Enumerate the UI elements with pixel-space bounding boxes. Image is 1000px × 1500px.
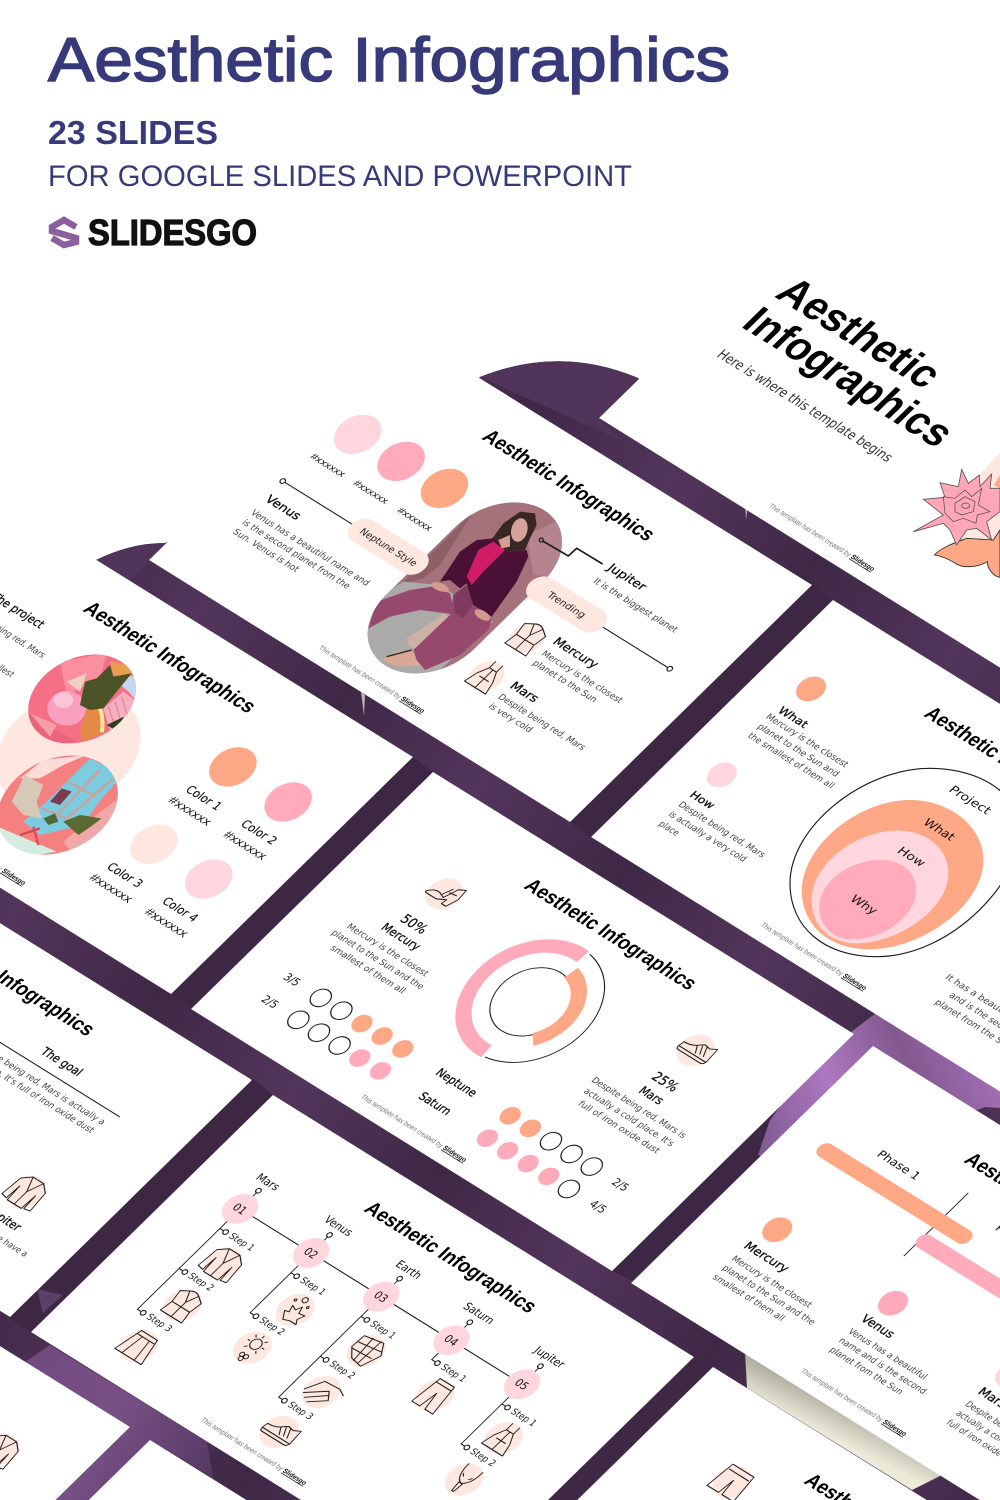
slide heading: Aesthetic Infographics xyxy=(519,875,702,995)
node 05 Jupiter: Jupiter xyxy=(530,1344,568,1371)
node 03 Earth xyxy=(356,1257,426,1317)
Venus block: Venus has a beautiful xyxy=(845,1327,929,1382)
connector from photo to Jupiter xyxy=(539,538,603,564)
icon: shorts xyxy=(704,1460,759,1500)
The goal block: The goal xyxy=(37,1044,86,1079)
Mars stat xyxy=(569,1048,717,1160)
colour 2: #xxxxxx xyxy=(220,829,269,863)
connector to Neptune Style xyxy=(279,478,354,526)
Jupiter text block: Jupiter xyxy=(603,560,650,593)
title slide heading xyxy=(733,268,996,455)
step markers and labels xyxy=(137,1226,540,1500)
Venus text block: Sun. Venus is hot xyxy=(230,527,302,575)
panel: bottom right slide xyxy=(471,1367,1000,1500)
series labels: Neptune xyxy=(433,1066,481,1100)
colour 3 xyxy=(86,816,192,906)
Mars block xyxy=(942,1358,1000,1480)
Mercury stat: smallest of them all xyxy=(327,943,407,996)
right text block xyxy=(923,973,1000,1058)
Mercury item: Mercury xyxy=(550,635,603,671)
diagram labels: Why xyxy=(847,893,881,918)
Venus text block: Venus xyxy=(262,492,305,523)
Jupiter block xyxy=(0,1171,46,1259)
slide heading: Aesthetic Infographics xyxy=(78,598,261,718)
Mercury stat: planet to the Sun and the xyxy=(328,928,426,992)
pale circle behind photos xyxy=(0,668,171,833)
colour 3: Color 3 xyxy=(104,860,147,890)
purple slide backdrop xyxy=(0,361,1000,1500)
icon: lotus flower xyxy=(913,453,1000,577)
panel: colour palette slide xyxy=(0,495,413,994)
pill: Neptune Style: Neptune Style xyxy=(356,527,420,569)
photo: coral room with window xyxy=(0,756,118,855)
colour 4: #xxxxxx xyxy=(141,906,191,940)
The goal block xyxy=(0,1013,137,1140)
step markers and labels: Step 2 xyxy=(326,1359,358,1381)
Mercury item: planet to the Sun xyxy=(530,659,599,705)
colour 1: #xxxxxx xyxy=(165,795,214,829)
Mercury stat xyxy=(319,891,464,1002)
Mercury block: Mercury is the closest xyxy=(729,1254,814,1311)
How block xyxy=(653,758,809,880)
right dot scale: 2/5 xyxy=(609,1176,632,1194)
Jupiter text block: It is the biggest planet xyxy=(590,577,680,635)
title slide subtitle: Here is where this template begins xyxy=(713,348,896,466)
colour swatches: #xxxxxx xyxy=(351,478,391,506)
panel: bottom centre slide xyxy=(0,1440,571,1500)
colour swatches xyxy=(306,407,479,533)
How block: How xyxy=(687,789,718,812)
Mercury stat: Mercury is the closest xyxy=(344,922,431,979)
What block: the smallest of them all xyxy=(745,731,836,791)
footer credit: This template has been created by Slidesgo xyxy=(199,1417,308,1487)
step icons xyxy=(111,1240,534,1500)
diagram labels: How xyxy=(894,844,929,870)
Mercury stat: Mercury xyxy=(378,920,425,953)
Mercury item xyxy=(498,615,640,715)
How block: Despite being red, Mars xyxy=(675,800,768,861)
Venus block: name and is the second xyxy=(836,1336,929,1397)
footer credit: This template has been created by Slidesgo xyxy=(317,645,426,715)
diagram labels: What xyxy=(920,816,959,844)
step markers and labels: Step 1 xyxy=(367,1319,398,1342)
panel: slide with portrait and colours xyxy=(149,323,812,822)
panel: bottom left slide xyxy=(0,1165,130,1500)
Slidesgo logo: SLIDESGO xyxy=(88,212,257,253)
node 02 Venus: Venus xyxy=(321,1213,356,1239)
subtitle: compatibility: FOR GOOGLE SLIDES AND POWERPOINT xyxy=(48,160,632,193)
icon: sneaker xyxy=(669,1029,723,1072)
node 05 Jupiter: 05 xyxy=(511,1376,532,1393)
colour 1: Color 1 xyxy=(182,782,225,813)
node 03 Earth: 03 xyxy=(371,1289,391,1305)
colour 2: Color 2 xyxy=(238,817,281,847)
Mars item: is very cold xyxy=(486,702,535,735)
connector to Jupiter end dot xyxy=(601,625,674,672)
colour 4 xyxy=(141,851,247,940)
node 04 Saturn xyxy=(425,1300,498,1362)
footer credit: This template has been created by Slidesgo xyxy=(767,503,876,573)
node 01 Mars: 01 xyxy=(229,1201,250,1217)
pill: Neptune Style xyxy=(342,514,435,579)
series labels: Saturn xyxy=(415,1089,455,1118)
node 01 Mars: Mars xyxy=(253,1171,283,1194)
What block: What xyxy=(775,705,811,731)
pill: Trending xyxy=(520,572,613,637)
tree connector lines xyxy=(137,1193,542,1487)
What block: Mercury is the closest xyxy=(763,712,851,770)
left dot scale xyxy=(255,968,418,1083)
subtitle: slide count: 23 SLIDES xyxy=(48,114,218,151)
right dot scale xyxy=(472,1104,635,1219)
slide heading: Aesthetic Infographics xyxy=(359,1198,542,1318)
diagram labels: Project xyxy=(946,783,995,818)
Mars stat: Despite being red, Mars is xyxy=(588,1076,689,1141)
Venus text block: Venus has a beautiful name and xyxy=(248,508,372,588)
text: The project xyxy=(0,584,68,684)
What block: planet to the Sun and xyxy=(754,722,841,779)
node 04 Saturn: 04 xyxy=(441,1332,461,1349)
pill: Trending: Trending xyxy=(543,589,588,621)
main title: Aesthetic Infographics xyxy=(48,26,730,95)
Mercury block: planet to the Sun and the xyxy=(719,1264,817,1327)
node 02 Venus: 02 xyxy=(300,1245,321,1262)
icon: sandal xyxy=(418,872,471,915)
step markers and labels: Step 1 xyxy=(438,1362,469,1385)
step markers and labels: Step 1 xyxy=(508,1407,539,1429)
phase timeline xyxy=(784,1118,1000,1348)
title slide heading: Aesthetic xyxy=(767,269,952,397)
step markers and labels: Step 2 xyxy=(467,1447,498,1469)
Mars stat: full of iron oxide dust xyxy=(575,1099,662,1156)
Venus block xyxy=(825,1286,979,1406)
Mars stat: Mars xyxy=(635,1083,668,1107)
right dot scale: 4/5 xyxy=(586,1198,610,1216)
Venus text block xyxy=(229,492,389,607)
series labels xyxy=(411,1066,481,1121)
colour swatches: #xxxxxx xyxy=(308,451,348,479)
step markers and labels: Step 1 xyxy=(226,1231,257,1254)
photo: woman in plum suit xyxy=(368,502,562,674)
footer credit: This template has been created by Slidesgo xyxy=(759,922,868,992)
Venus block: planet from the Sun xyxy=(826,1345,905,1397)
step markers and labels: Step 3 xyxy=(285,1400,316,1422)
Mars item xyxy=(453,655,605,762)
step markers and labels: Step 2 xyxy=(256,1315,287,1338)
phase timeline: Phase 1 xyxy=(874,1148,924,1183)
slide heading: Aesthetic Infographics xyxy=(477,426,660,546)
step markers and labels: Step 1 xyxy=(297,1275,328,1298)
node 01 Mars xyxy=(214,1169,285,1229)
Mercury item: Mercury is the closest xyxy=(539,649,625,706)
photo: pink room with plant xyxy=(28,654,136,744)
panel: slide A pills xyxy=(342,482,613,670)
icon: jacket xyxy=(0,1169,55,1214)
What block xyxy=(744,672,896,791)
How block: place xyxy=(656,820,681,838)
panel: goal slide xyxy=(0,818,252,1317)
Venus text block: is the second planet from the xyxy=(239,518,352,591)
node 05 Jupiter xyxy=(495,1344,568,1406)
panel: phases slide xyxy=(631,1046,1000,1500)
colour 1 xyxy=(165,739,271,829)
Mars stat: actually a cold place. It's xyxy=(581,1087,677,1149)
How block: is actually a very cold xyxy=(666,810,749,864)
Mercury block: Mercury xyxy=(741,1239,793,1275)
step markers and labels: Step 2 xyxy=(185,1271,216,1294)
Mars stat: 25% xyxy=(648,1070,682,1095)
Venus block: Venus xyxy=(858,1312,898,1341)
Mars item: Despite being red, Mars xyxy=(495,693,588,753)
diagram labels xyxy=(839,783,995,922)
node 02 Venus xyxy=(285,1213,356,1274)
footer credit: This template has been created by Slidesgo xyxy=(799,1368,908,1438)
colour swatches: #xxxxxx xyxy=(395,505,435,533)
step markers and labels: Step 3 xyxy=(143,1312,175,1334)
node 04 Saturn: Saturn xyxy=(460,1300,498,1327)
colour 4: Color 4 xyxy=(159,894,202,925)
node 03 Earth: Earth xyxy=(392,1258,425,1282)
Mercury block: smallest of them all xyxy=(710,1273,787,1324)
Mars item: Mars xyxy=(507,679,543,705)
left dot scale: 3/5 xyxy=(280,971,304,989)
Mercury block xyxy=(709,1213,869,1337)
donut chart xyxy=(431,921,635,1085)
colour 2 xyxy=(220,774,326,863)
Mercury stat: 50% xyxy=(396,912,430,937)
nested circle diagram xyxy=(790,768,1000,957)
title slide heading: Infographics xyxy=(733,299,965,455)
colour 3: #xxxxxx xyxy=(86,872,135,906)
icon: jacket xyxy=(0,1428,28,1472)
footer credit: This template has been created by Slidesgo xyxy=(359,1094,468,1164)
panel: donut chart slide xyxy=(191,772,854,1271)
panel: title slide xyxy=(599,181,1000,680)
Jupiter text block xyxy=(590,560,697,635)
panel: What How Why slide xyxy=(591,600,1000,1099)
panel: steps tree slide xyxy=(31,1095,694,1500)
left dot scale: 2/5 xyxy=(258,993,282,1011)
